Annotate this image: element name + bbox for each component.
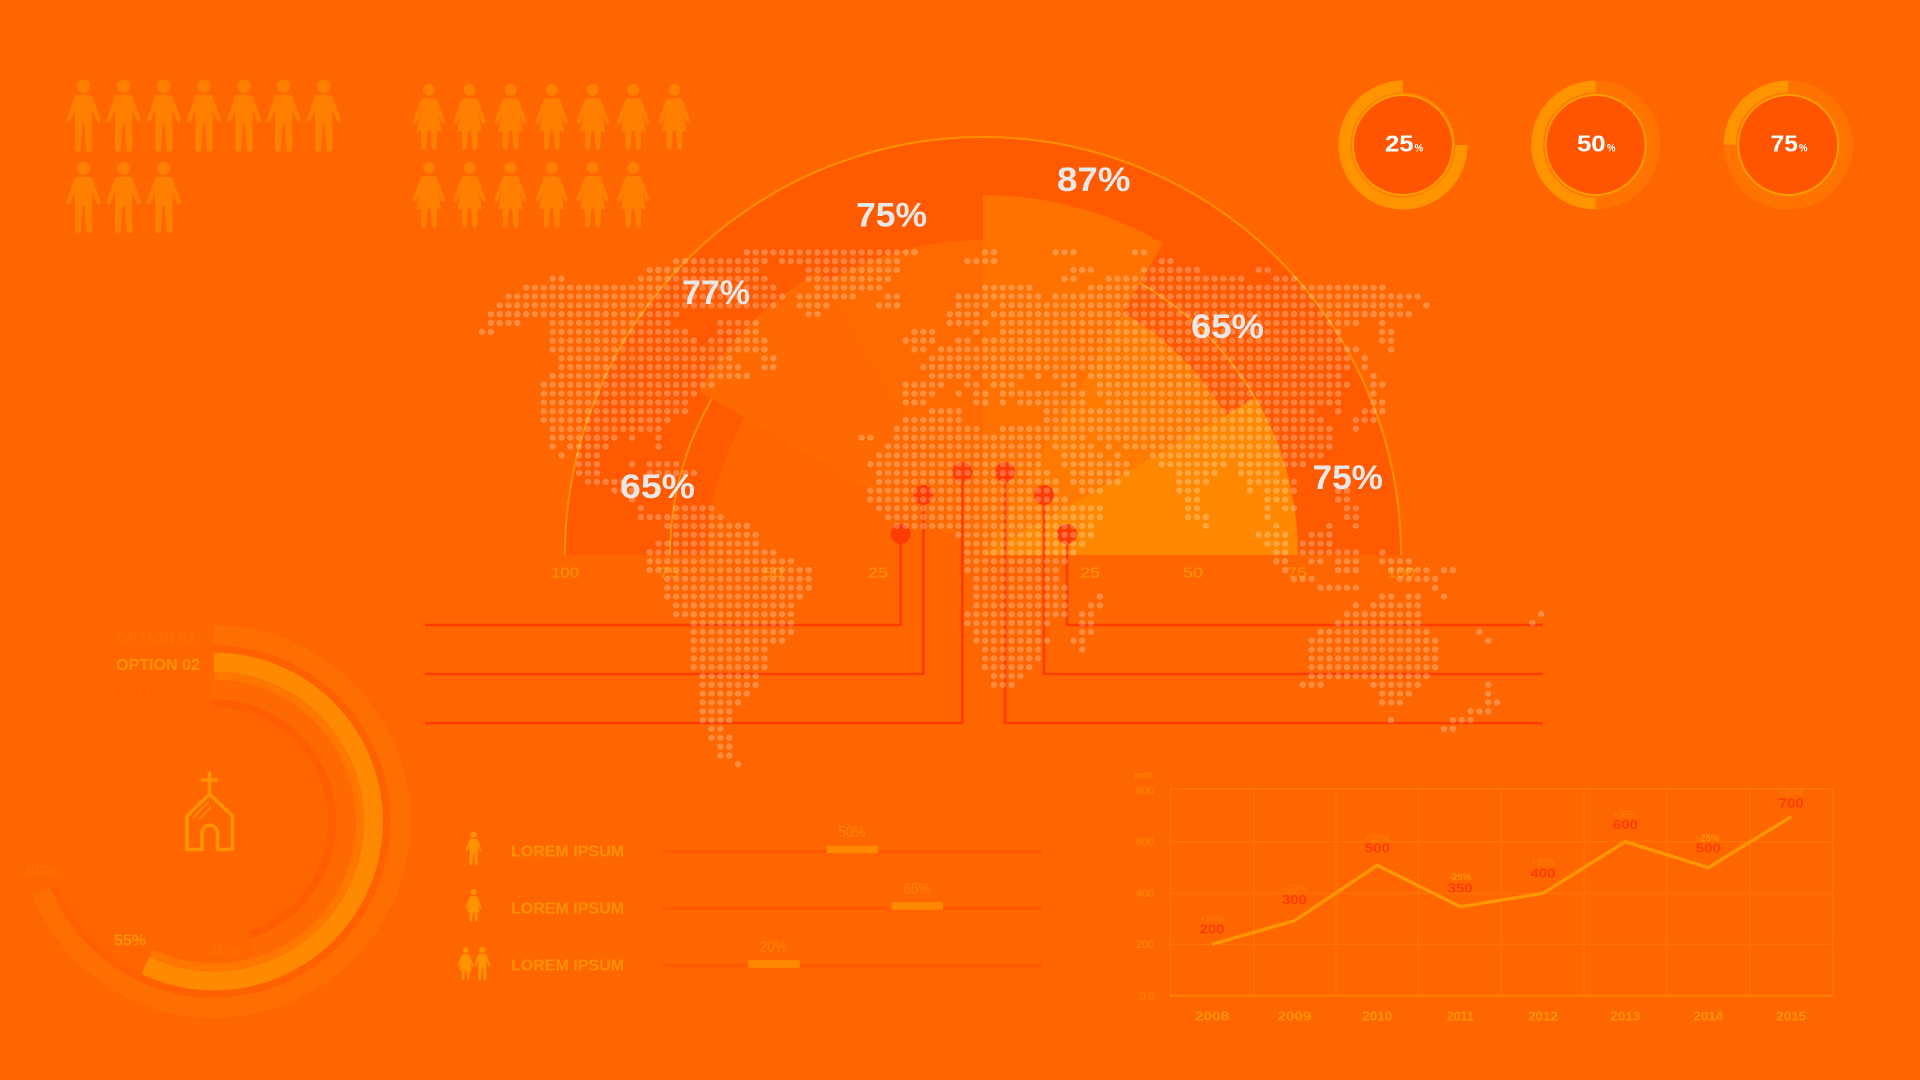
year labels: 2014 [1693,1010,1723,1024]
ring option 02 [145,662,373,981]
women pictogram group [413,84,690,228]
sector 87% [983,195,1163,555]
semicircle axis labels: 100 [1387,564,1415,582]
data values [1200,797,1804,936]
semicircle percentage labels: 65% [1191,308,1264,346]
row 1 man: 50% [838,824,866,841]
row 2 woman [466,881,1042,922]
radial chart percentages: 65% [26,864,58,880]
year labels: 2009 [1277,1010,1311,1024]
line chart [1134,770,1833,1024]
y axis labels: 0.0 [1139,990,1155,1002]
semicircle percentage labels: 65% [620,468,695,506]
y axis labels: 200 [1136,939,1154,951]
radial chart legend: OPTION 01 [116,630,196,647]
chart grid [1170,789,1833,996]
row 2 woman: LOREM IPSUM [511,901,624,918]
row 1 man: LOREM IPSUM [511,844,624,861]
donut 25% [1339,81,1467,209]
ring option 03 [214,690,346,948]
semicircle axis labels: 75 [1287,564,1307,582]
outer dark band [565,137,1401,555]
data values: 350 [1448,881,1473,895]
donut 25%: % [1415,142,1423,154]
sector 75% top [826,240,983,555]
semicircle percentage labels [620,161,1383,506]
y axis labels: 800 [1136,785,1154,797]
year labels: 2011 [1447,1010,1474,1024]
radial bar chart [41,635,401,1008]
donut 75%: 75 [1771,130,1798,156]
change percentages: -25% [1697,833,1720,844]
semicircle percentage labels: 77% [682,274,750,312]
semicircle percentage labels: 75% [1312,459,1383,497]
data values: 600 [1613,818,1638,832]
radial chart percentages: 55% [114,932,146,950]
semicircle axis labels: 25 [868,564,888,582]
data values: 500 [1365,842,1390,856]
dotted world map [482,252,1542,764]
radial chart legend: OPTION 02 [116,657,200,674]
men pictogram group [66,80,341,234]
sector 65% left [708,418,983,555]
sector 77% [699,271,983,555]
semicircle percentage labels: 75% [856,196,927,234]
data values: 400 [1530,867,1556,881]
change percentages [1200,788,1804,924]
year labels: 2013 [1610,1010,1640,1024]
data values: 200 [1200,922,1225,936]
data line [1212,817,1791,944]
icon: church [187,773,232,850]
y axis labels: 400 [1136,888,1154,900]
year labels: 2012 [1528,1010,1558,1024]
progress rows [458,824,1042,980]
data values: 500 [1696,842,1721,856]
row 3 couple [458,939,1042,980]
year labels [1195,1010,1806,1024]
sector 65% right [983,312,1226,555]
semicircular polar chart [565,137,1401,555]
year labels: 2015 [1776,1010,1806,1024]
data values: 300 [1282,893,1307,907]
row 3 couple: LOREM IPSUM [511,958,624,975]
donut 50% [1537,87,1654,203]
radial chart legend [116,630,200,701]
donut 50%: 50 [1577,130,1606,156]
semicircle axis labels: 25 [1080,564,1100,582]
y axis labels: 600 [1136,836,1154,848]
semicircle axis labels: 50 [1183,564,1203,582]
year labels: 2010 [1362,1010,1392,1024]
donut 75% [1730,87,1846,203]
row 2 woman: 65% [904,881,931,898]
thin scale arcs [565,137,1401,555]
donut 75%: % [1799,142,1808,154]
semicircle axis labels: 75 [659,564,679,582]
change percentages: +35% [1531,858,1556,869]
row 3 couple: 20% [760,939,787,956]
location pins and leader lines [425,462,1543,723]
row 1 man [466,824,1042,865]
y axis labels [1134,770,1155,1002]
semicircle axis labels: 50 [763,564,783,582]
radial chart percentages [26,864,240,960]
y axis labels: units [1134,770,1154,780]
data values: 700 [1779,797,1804,811]
semicircle percentage labels: 87% [1057,161,1130,199]
radial chart legend: OPTION 03 [116,684,200,701]
radial chart percentages: 45% [208,942,240,960]
change percentages: +20% [1282,884,1307,895]
change percentages: +35% [1613,809,1638,820]
donut 50%: % [1607,142,1616,154]
change percentages: +10% [1200,913,1225,924]
change percentages: +35% [1779,788,1804,799]
ring option 01 [41,635,401,1008]
semicircle axis labels: 100 [551,564,579,582]
year labels: 2008 [1195,1010,1229,1024]
semicircle axis labels [551,564,1415,582]
change percentages: -25% [1449,872,1472,883]
donut 25%: 25 [1385,130,1414,156]
sector 75% right [983,398,1298,555]
change percentages: +35% [1365,833,1390,844]
